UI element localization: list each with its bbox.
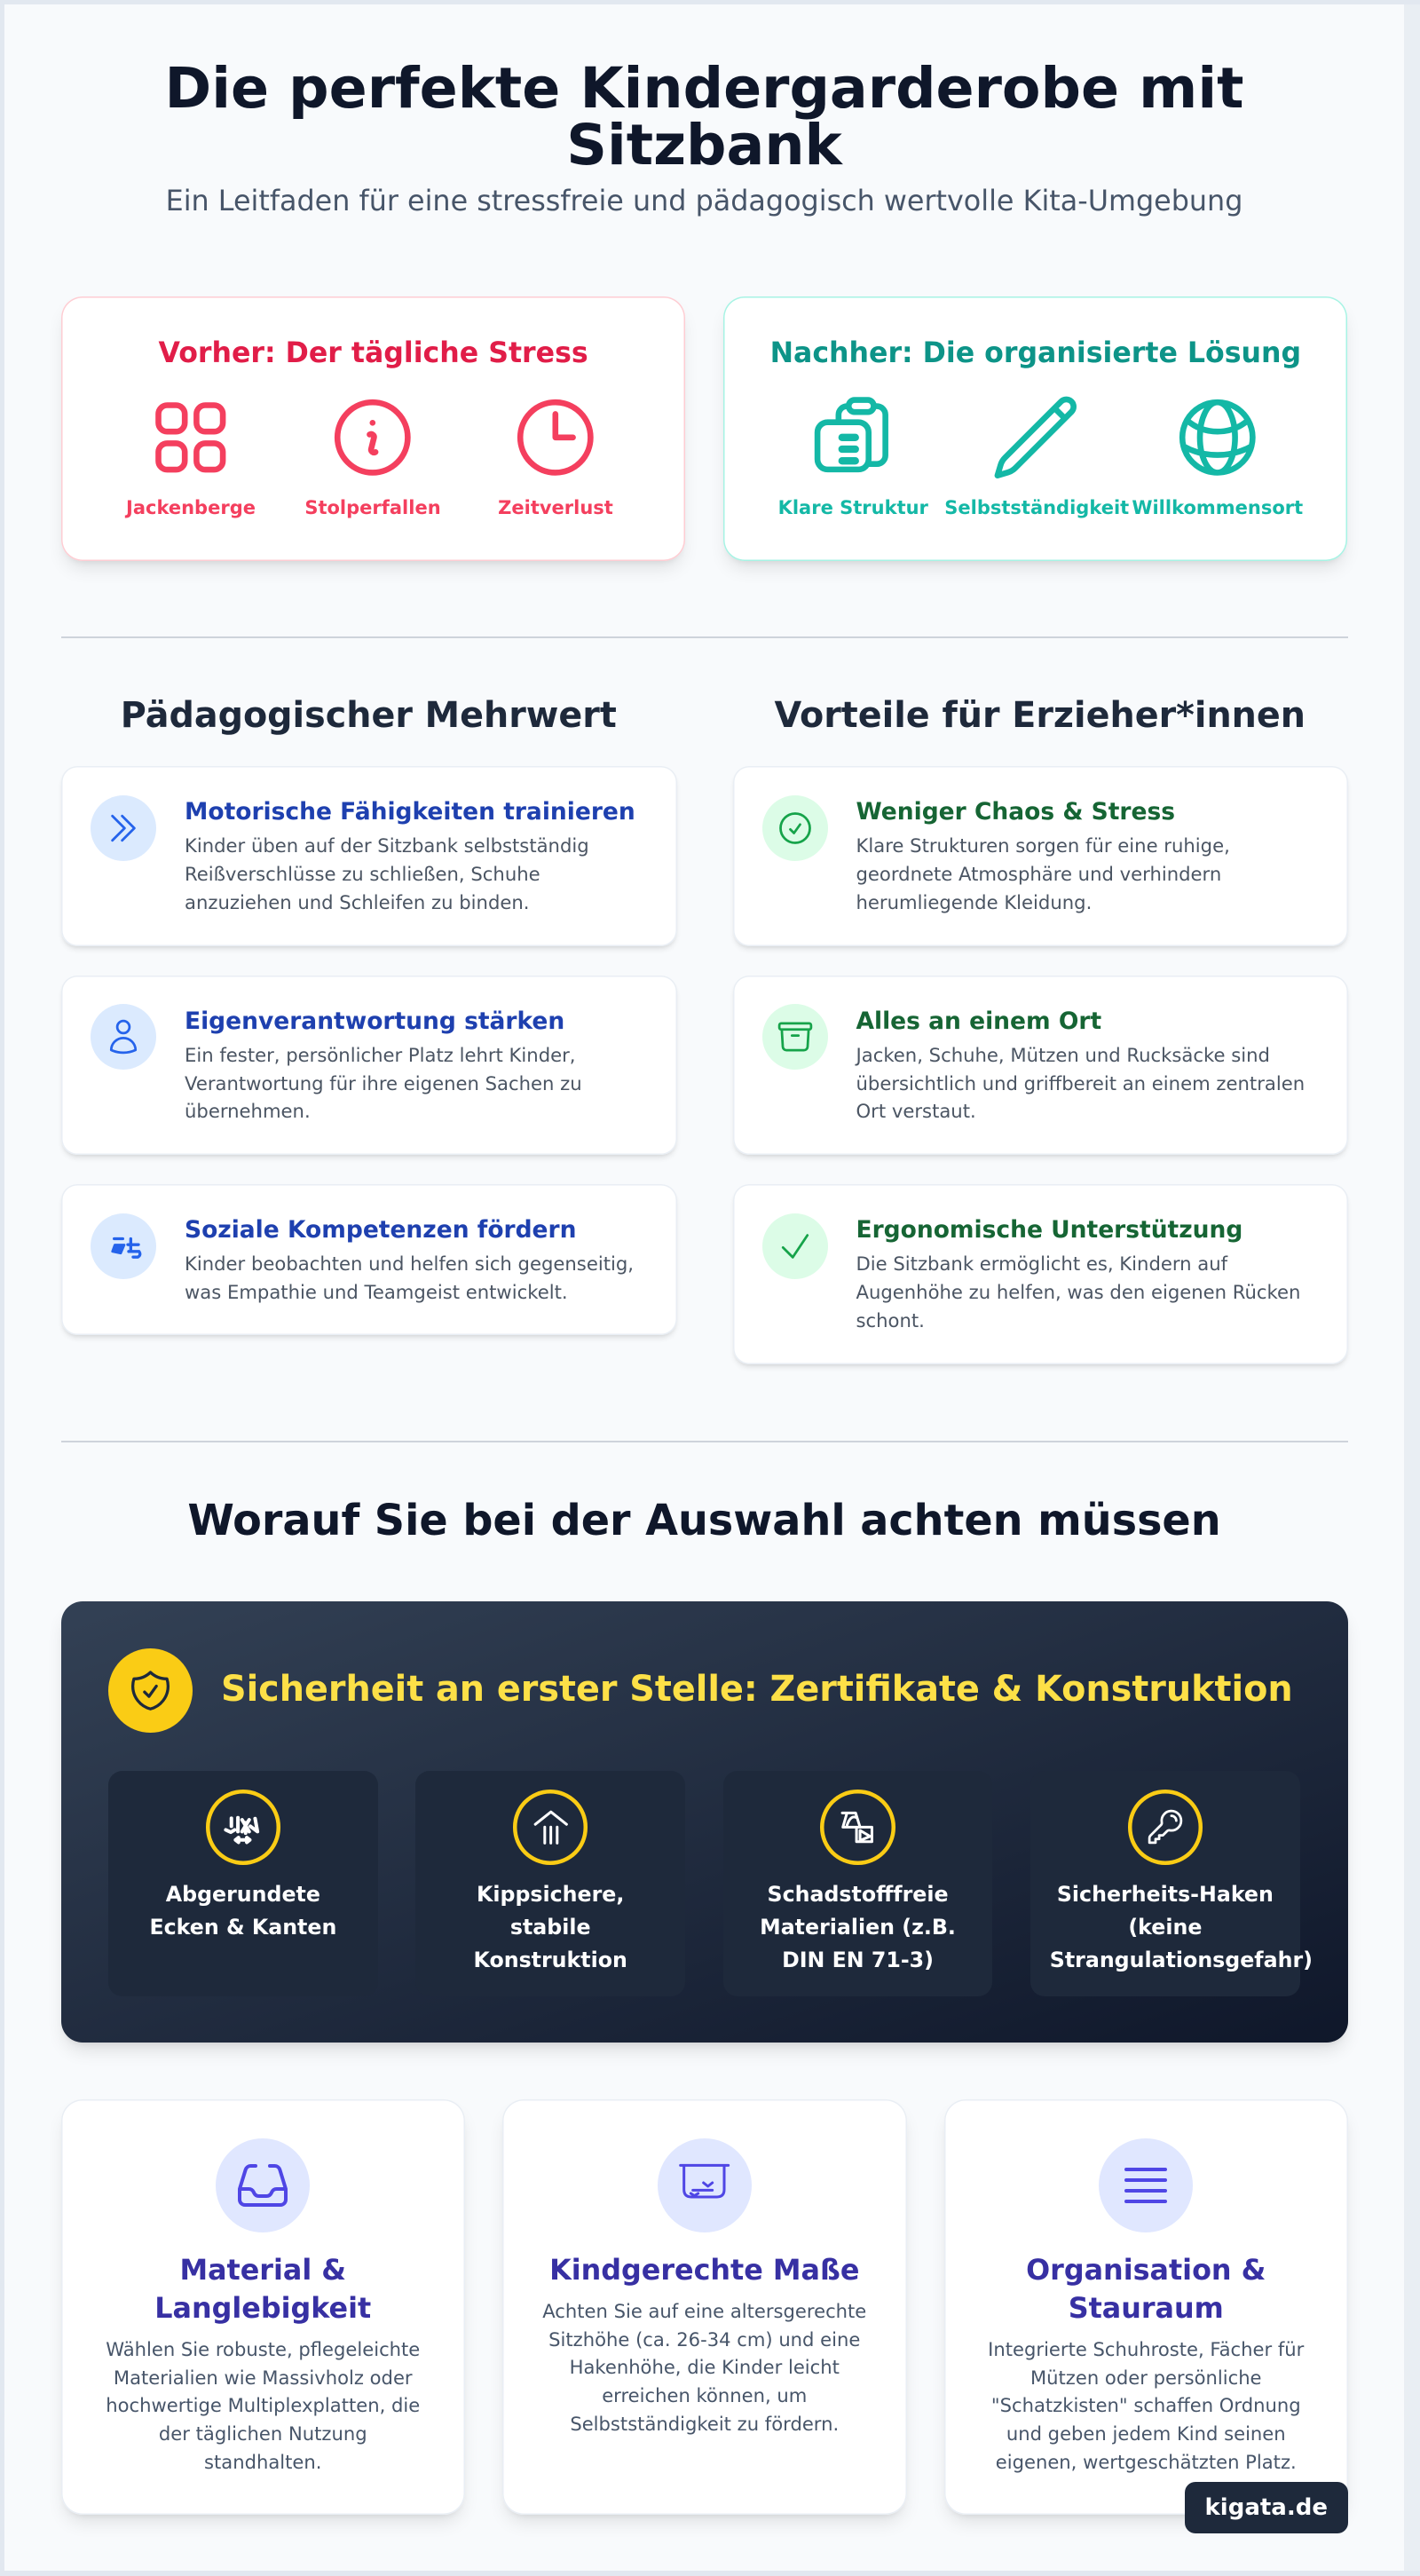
card: Alles an einem Ort [733, 975, 1348, 1155]
card text: und geben jedem Kind seinen [1006, 2422, 1286, 2445]
label [474, 1882, 627, 1972]
card text: Kinder üben auf der Sitzbank selbstständig [185, 834, 589, 857]
label: Jackenberge: Jackenberge [126, 497, 256, 518]
card text: Reißverschlüsse zu schließen, Schuhe [185, 863, 540, 885]
card title: Soziale Kompetenzen fördern [185, 1216, 576, 1244]
card text [185, 834, 589, 913]
card: Material [61, 2099, 465, 2515]
panel: safety [61, 1601, 1348, 2043]
card: Motorische Fähigkeiten [61, 766, 676, 946]
card: Organisation [944, 2099, 1348, 2515]
card text: anzuziehen und Schleifen zu binden. [185, 891, 530, 913]
panel: before [61, 296, 685, 561]
card heading: Material & [179, 2254, 346, 2287]
card: Eigenverantwortung [61, 975, 676, 1155]
card text [185, 1044, 582, 1122]
card text: eigenen, wertgeschätzten Platz. [996, 2451, 1297, 2473]
icon: container [658, 2138, 752, 2232]
card text: Hakenhöhe, die Kinder leicht [570, 2356, 840, 2378]
icon: user [91, 1004, 156, 1070]
icon: squares [155, 402, 225, 472]
label: Schadstofffreie [768, 1882, 949, 1907]
icon: check [761, 1213, 827, 1278]
heading: before: Vorher: Der tägliche Stress [158, 337, 588, 369]
card: Weniger Chaos [733, 766, 1348, 946]
badge: kigata.de: kigata.de [1205, 2494, 1328, 2521]
card heading [154, 2254, 371, 2324]
title: Die perfekte Kindergarderobe mit [165, 55, 1243, 121]
icon: pencil [994, 396, 1077, 478]
card text: standhalten. [204, 2451, 321, 2473]
label: Zeitverlust: Zeitverlust [498, 497, 613, 518]
title: Sitzbank [566, 112, 842, 178]
card title: Eigenverantwortung stärken [185, 1007, 564, 1035]
card text: schont. [856, 1309, 925, 1331]
card text: Klare Strukturen sorgen für eine ruhige, [856, 834, 1230, 857]
label: Willkommensort: Willkommensort [1132, 497, 1303, 518]
card text: Integrierte Schuhroste, Fächer für [988, 2338, 1304, 2360]
card text: Wählen Sie robuste, pflegeleichte [106, 2338, 420, 2360]
icon: four bars [1099, 2138, 1193, 2232]
icon: check circle [761, 795, 827, 861]
card text: "Schatzkisten" schaffen Ordnung [991, 2394, 1301, 2416]
card text [106, 2338, 420, 2473]
item: rounded corners [108, 1771, 378, 1996]
card heading: Kindgerechte Maße [549, 2254, 859, 2287]
icon: clock [517, 399, 594, 476]
card title: Weniger Chaos & Stress [856, 798, 1175, 826]
label: Selbstständigkeit: Selbstständigkeit [944, 497, 1129, 518]
card text: Augenhöhe zu helfen, was den eigenen Rücken [856, 1281, 1300, 1303]
card text [542, 2300, 866, 2435]
label: Ecken & Kanten [149, 1914, 336, 1939]
card title: Alles an einem Ort [856, 1007, 1101, 1035]
card text: was Empathie und Teamgeist entwickelt. [185, 1281, 568, 1303]
icon: clipboard [815, 397, 888, 472]
item: safe materials [723, 1771, 992, 1996]
label: Sicherheits-Haken [1057, 1882, 1274, 1907]
icon: shield [108, 1648, 193, 1733]
heading: after: Nachher: Die organisierte Lösung [770, 337, 1301, 369]
card text [856, 834, 1230, 913]
label: (keine [1128, 1914, 1202, 1939]
card text [856, 1252, 1300, 1331]
card text: Ort verstaut. [856, 1100, 976, 1122]
icon: key [1128, 1790, 1203, 1864]
icon: social glyph [91, 1213, 156, 1278]
label: Strangulationsgefahr) [1050, 1948, 1313, 1972]
title [165, 55, 1243, 178]
item: safety hooks [1030, 1771, 1300, 1996]
card: Ergonomische Unterstützung [733, 1184, 1348, 1363]
card text: übernehmen. [185, 1100, 311, 1122]
card: Soziale Kompetenzen [61, 1184, 676, 1335]
card text: herumliegende Kleidung. [856, 891, 1092, 913]
card heading: Langlebigkeit [154, 2292, 371, 2324]
card text: Jacken, Schuhe, Mützen und Rucksäcke sind [856, 1044, 1270, 1066]
card text: erreichen können, um [602, 2384, 807, 2406]
icon: chevron and bars [513, 1790, 588, 1864]
card title: Motorische Fähigkeiten trainieren [185, 798, 635, 826]
icon: globe [1179, 399, 1256, 476]
card heading: Stauraum [1069, 2292, 1224, 2324]
icon: double chevron [91, 795, 156, 861]
card text: hochwertige Multiplexplatten, die [106, 2394, 420, 2416]
card text: Sitzhöhe (ca. 26-34 cm) und eine [548, 2328, 860, 2351]
label: Klare Struktur: Klare Struktur [778, 497, 928, 518]
heading: safety: Sicherheit an erster Stelle: Zertifikate & Konstruktion [221, 1669, 1293, 1710]
heading: Pädagogischer Mehrwert: Pädagogischer Mehrwert [121, 695, 617, 736]
item: stable construction [415, 1771, 685, 1996]
card heading [1026, 2254, 1266, 2324]
label: Stolperfallen: Stolperfallen [304, 497, 441, 518]
card text: Mützen oder persönliche [1030, 2367, 1262, 2389]
card text: geordnete Atmosphäre und verhindern [856, 863, 1221, 885]
card text: Ein fester, persönlicher Platz lehrt Kinder, [185, 1044, 576, 1066]
badge: kigata.de [1185, 2482, 1347, 2533]
label: DIN EN 71-3) [782, 1948, 934, 1972]
card text: übersichtlich und griffbereit an einem zentralen [856, 1072, 1305, 1094]
card text [185, 1252, 634, 1303]
label [1050, 1882, 1313, 1972]
heading: Vorteile für Erzieher*innen: Vorteile für Erzieher*innen [774, 695, 1306, 736]
card text [855, 1044, 1305, 1122]
card text: Materialien wie Massivholz oder [114, 2367, 413, 2389]
subtitle: Ein Leitfaden für eine stressfreie und pädagogisch wertvolle Kita-Umgebung [166, 185, 1242, 217]
card text: Die Sitzbank ermöglicht es, Kindern auf [856, 1252, 1227, 1275]
card text: Selbstständigkeit zu fördern. [570, 2413, 839, 2435]
card title: Ergonomische Unterstützung [856, 1216, 1242, 1244]
icon: material glyph [820, 1790, 895, 1864]
card text: Kinder beobachten und helfen sich gegenseitig, [185, 1252, 634, 1275]
icon: information circle [334, 399, 411, 476]
card text [988, 2338, 1305, 2473]
label: Abgerundete [166, 1882, 320, 1907]
label: Konstruktion [474, 1948, 627, 1972]
label [760, 1882, 956, 1972]
icon: archive box [761, 1004, 827, 1070]
card text: der täglichen Nutzung [159, 2422, 367, 2445]
icon: rounded corners glyph [206, 1790, 280, 1864]
card heading: Organisation & [1026, 2254, 1266, 2287]
heading: Worauf Sie bei der Auswahl achten müssen: Worauf Sie bei der Auswahl achten müssen [187, 1497, 1221, 1545]
label [149, 1882, 336, 1939]
card text: Verantwortung für ihre eigenen Sachen zu [185, 1072, 582, 1094]
label: Kippsichere, [477, 1882, 624, 1907]
label: stabile [510, 1914, 591, 1939]
card text: Achten Sie auf eine altersgerechte [542, 2300, 866, 2322]
card: Kindgerechte Maße [502, 2099, 907, 2515]
panel: after [723, 296, 1347, 561]
label: Materialien (z.B. [760, 1914, 956, 1939]
icon: inbox [216, 2138, 310, 2232]
